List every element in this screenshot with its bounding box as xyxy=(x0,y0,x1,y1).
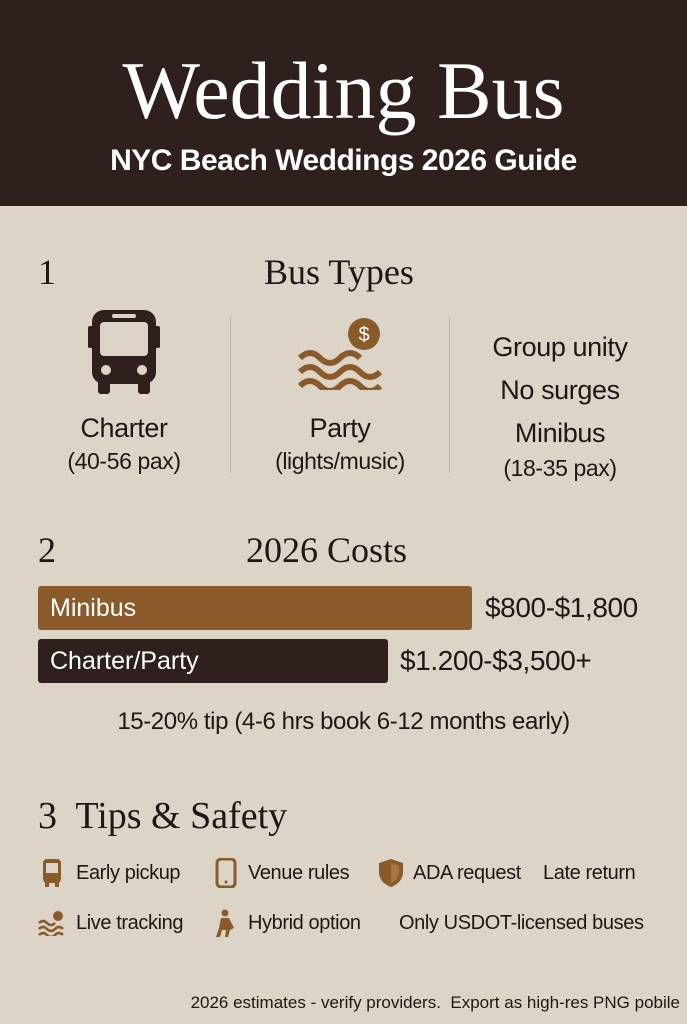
section 3 heading: 3 Tips & Safety xyxy=(38,795,287,837)
section 2 heading: 2 xyxy=(38,530,56,570)
section 2 heading: 2026 Costs xyxy=(246,530,407,570)
label: charter xyxy=(67,413,181,474)
tips row 2: Only USDOT-licensed buses xyxy=(399,912,644,934)
label: minibus: No surges xyxy=(500,375,620,405)
tips row 1: ADA request xyxy=(413,862,521,884)
icon: person xyxy=(216,910,234,937)
header xyxy=(0,0,687,206)
tips row 2 xyxy=(38,910,644,937)
subtitle: NYC Beach Weddings 2026 Guide xyxy=(110,144,577,177)
icon: bus small xyxy=(43,859,61,887)
icon: bus xyxy=(88,310,160,394)
icon: phone xyxy=(216,858,236,888)
section 1 heading xyxy=(38,252,414,292)
bar: minibus xyxy=(38,586,472,630)
label: charter: Charter xyxy=(80,413,168,443)
label: charter: (40-56 pax) xyxy=(67,448,181,474)
section 2 heading xyxy=(38,530,407,570)
divider 2 xyxy=(449,318,450,473)
label: party xyxy=(275,413,405,474)
icon: waves with dollar: $ xyxy=(358,324,370,346)
label: party: Party xyxy=(309,413,371,443)
bar: charter/party xyxy=(38,639,388,683)
value: charter: $1.200-$3,500+ xyxy=(400,645,591,676)
title: Wedding Bus xyxy=(122,45,565,136)
icon: waves pin xyxy=(38,911,64,936)
label: minibus xyxy=(492,332,628,448)
label: minibus pax: (18-35 pax) xyxy=(503,455,617,481)
icon: shield xyxy=(379,859,403,887)
label: party: (lights/music) xyxy=(275,448,405,474)
tips row 1: Late return xyxy=(543,862,635,884)
section 1 heading: Bus Types xyxy=(264,252,414,292)
footer note: 2026 estimates - verify providers. Export as high-res PNG pobile xyxy=(191,993,680,1012)
tips row 1: Venue rules xyxy=(248,862,349,884)
panel: bus types xyxy=(67,310,628,481)
tips row 2: Live tracking xyxy=(76,912,183,934)
divider 1 xyxy=(230,318,231,473)
label: minibus: Minibus xyxy=(515,418,605,448)
tips row 1 xyxy=(43,858,635,888)
bar: minibus: Minibus xyxy=(50,594,136,622)
label: minibus: Group unity xyxy=(492,332,628,362)
value: minibus: $800-$1,800 xyxy=(485,592,638,623)
note: tip: 15-20% tip (4-6 hrs book 6-12 months early) xyxy=(117,708,570,735)
bar: charter/party: Charter/Party xyxy=(50,647,199,675)
section 1 heading: 1 xyxy=(38,252,56,292)
tips row 2: Hybrid option xyxy=(248,912,361,934)
tips row 1: Early pickup xyxy=(76,862,180,884)
icon: waves with dollar xyxy=(298,318,382,390)
